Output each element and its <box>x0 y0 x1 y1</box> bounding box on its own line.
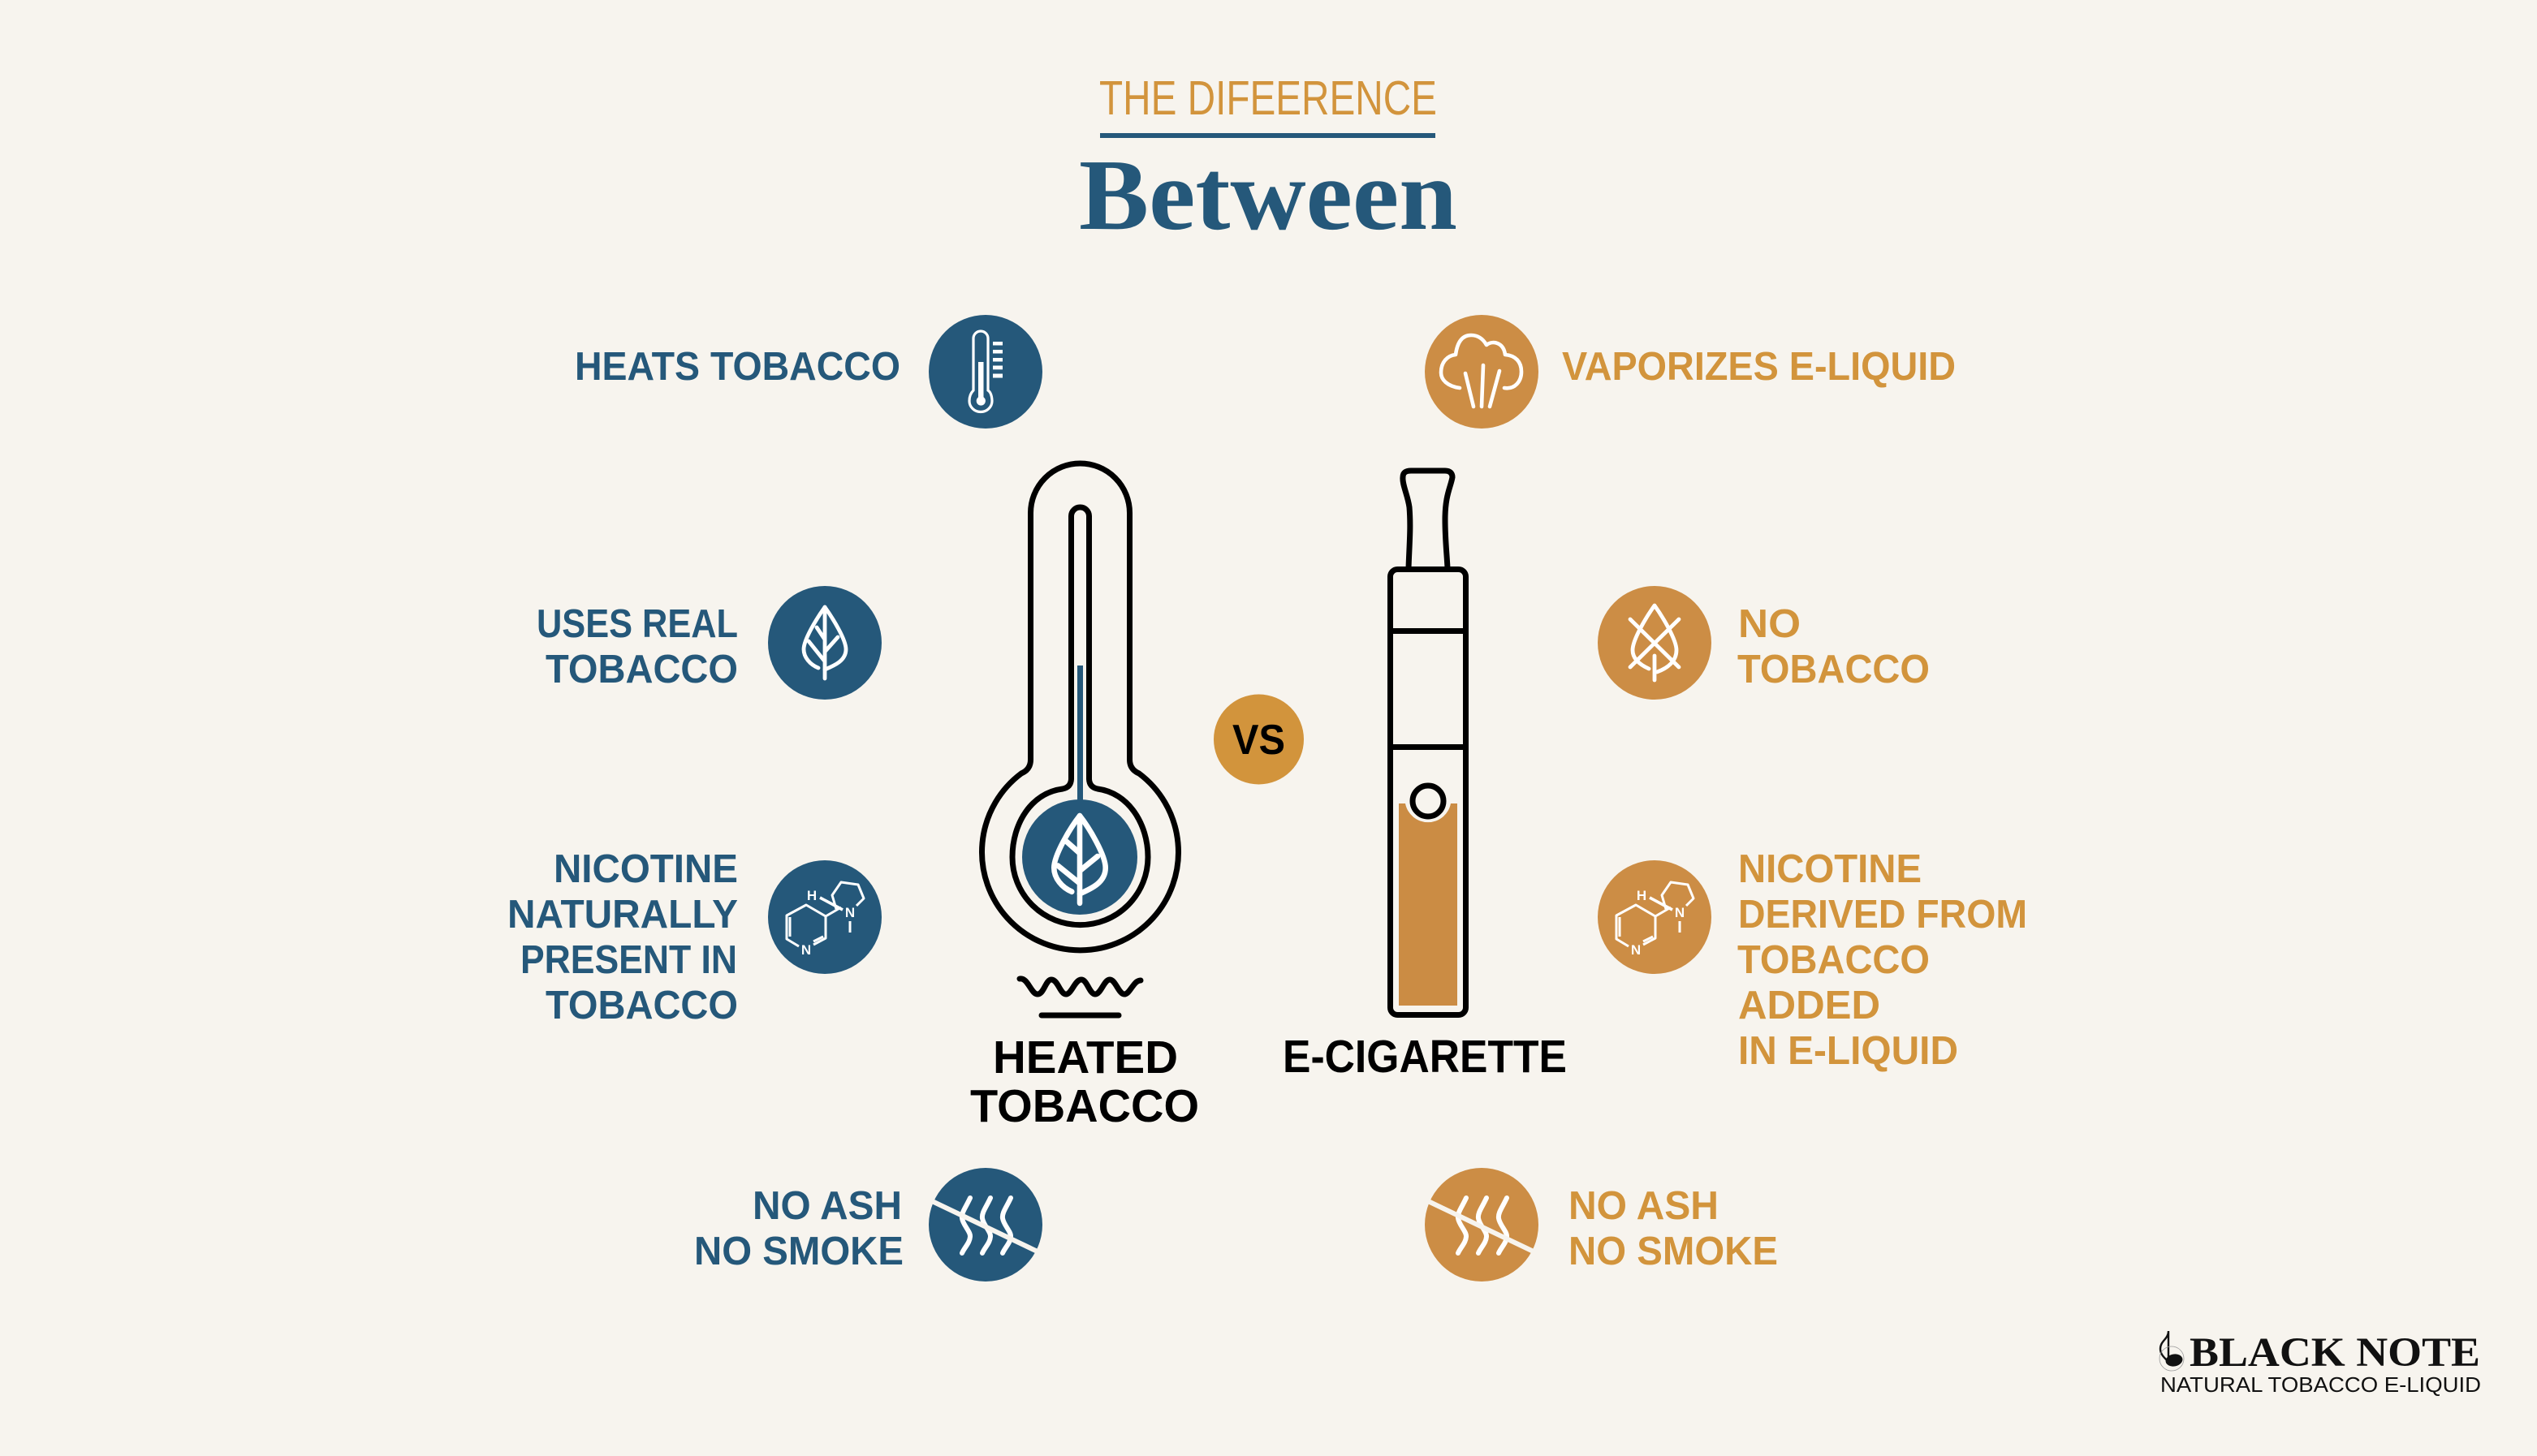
text: heats tobacco: HEATS TOBACCO <box>575 345 900 389</box>
illustration: e-cigarette device <box>1283 471 1567 1083</box>
body divider upper <box>1390 628 1466 634</box>
icon: no smoke <box>929 1168 1042 1282</box>
text: no tobacco <box>1737 602 1930 691</box>
text: uses real tobacco <box>537 602 738 691</box>
heading: heated tobacco <box>970 1032 1199 1132</box>
text: no ash no smoke: NO ASH <box>1568 1184 1719 1228</box>
icon: no tobacco leaf <box>1598 586 1711 700</box>
text: nicotine naturally present <box>507 847 738 1027</box>
text: nicotine derived from tobacco: IN E-LIQUID <box>1738 1029 1958 1073</box>
heat base line <box>1042 1013 1119 1018</box>
text: nicotine naturally present: NICOTINE <box>554 847 738 891</box>
text: no ash no smoke: NO SMOKE <box>1568 1230 1778 1273</box>
icon: nicotine molecule: N <box>1675 905 1685 920</box>
text: vaporizes e-liquid: VAPORIZES E-LIQUID <box>1562 345 1956 389</box>
badge: vs: VS <box>1232 717 1285 764</box>
heading: heated tobacco: HEATED <box>993 1032 1178 1083</box>
title word: between: Between <box>1079 140 1457 252</box>
icon: nicotine molecule: H <box>807 888 817 903</box>
text: no ash no smoke <box>1568 1184 1778 1273</box>
icon: music note <box>2159 1331 2184 1371</box>
text: no ash no smoke <box>694 1184 904 1273</box>
mercury bar <box>1077 666 1083 803</box>
body divider lower <box>1390 744 1466 750</box>
logo: black note <box>2159 1330 2481 1397</box>
icon: nicotine molecule: N <box>1631 942 1641 958</box>
heading: e-cigarette: E-CIGARETTE <box>1283 1031 1567 1083</box>
icon: chamber leaf <box>1054 816 1106 903</box>
heat wave <box>1020 979 1141 994</box>
text: nicotine derived from tobacco: NICOTINE <box>1738 847 1922 891</box>
heat chamber fill <box>1022 799 1137 915</box>
air hole <box>1413 786 1443 816</box>
panel: heated tobacco features <box>507 315 1042 1282</box>
text: nicotine naturally present: NATURALLY <box>507 893 738 937</box>
icon: no smoke <box>1425 1168 1538 1282</box>
logo wordmark: BLACK NOTE <box>2190 1330 2480 1376</box>
thermometer inner tube and chamber <box>1012 507 1148 925</box>
heading: heated tobacco: TOBACCO <box>970 1080 1199 1132</box>
text: uses real tobacco: USES REAL <box>537 602 738 646</box>
icon: nicotine molecule <box>768 860 882 974</box>
icon: nicotine molecule: N <box>845 905 855 920</box>
icon: nicotine molecule: H <box>1637 888 1646 903</box>
illustration: heated tobacco device <box>970 463 1199 1132</box>
text: no tobacco: TOBACCO <box>1737 648 1930 691</box>
icon: thermometer <box>929 315 1042 429</box>
icon: nicotine molecule: N <box>801 942 811 958</box>
text: nicotine derived from tobacco: DERIVED FROM <box>1738 893 2027 937</box>
text: nicotine derived from tobacco <box>1737 847 2027 1073</box>
text: no ash no smoke: NO ASH <box>753 1184 902 1228</box>
thermometer outer outline <box>982 463 1179 950</box>
text: nicotine derived from tobacco: TOBACCO <box>1737 938 1930 982</box>
text: nicotine naturally present: TOBACCO <box>546 984 738 1027</box>
title <box>1079 71 1457 252</box>
text: nicotine derived from tobacco: ADDED <box>1738 984 1880 1027</box>
mouthpiece <box>1403 471 1452 568</box>
text: nicotine naturally present: PRESENT IN <box>520 938 737 982</box>
text: uses real tobacco: TOBACCO <box>546 648 738 691</box>
icon: nicotine molecule <box>1598 860 1711 974</box>
icon: leaf <box>768 586 882 700</box>
panel: e-cigarette features <box>1425 315 2027 1282</box>
text: no tobacco: NO <box>1738 602 1801 646</box>
body outline <box>1390 570 1466 1014</box>
logo tagline: NATURAL TOBACCO E-LIQUID <box>2160 1372 2481 1397</box>
title line: the difference: THE DIFEERENCE <box>1099 71 1437 125</box>
icon: vapor cloud <box>1425 315 1538 429</box>
title underline <box>1100 133 1435 138</box>
badge: vs <box>1214 695 1304 784</box>
liquid tank <box>1399 803 1457 1006</box>
text: no ash no smoke: NO SMOKE <box>694 1230 904 1273</box>
